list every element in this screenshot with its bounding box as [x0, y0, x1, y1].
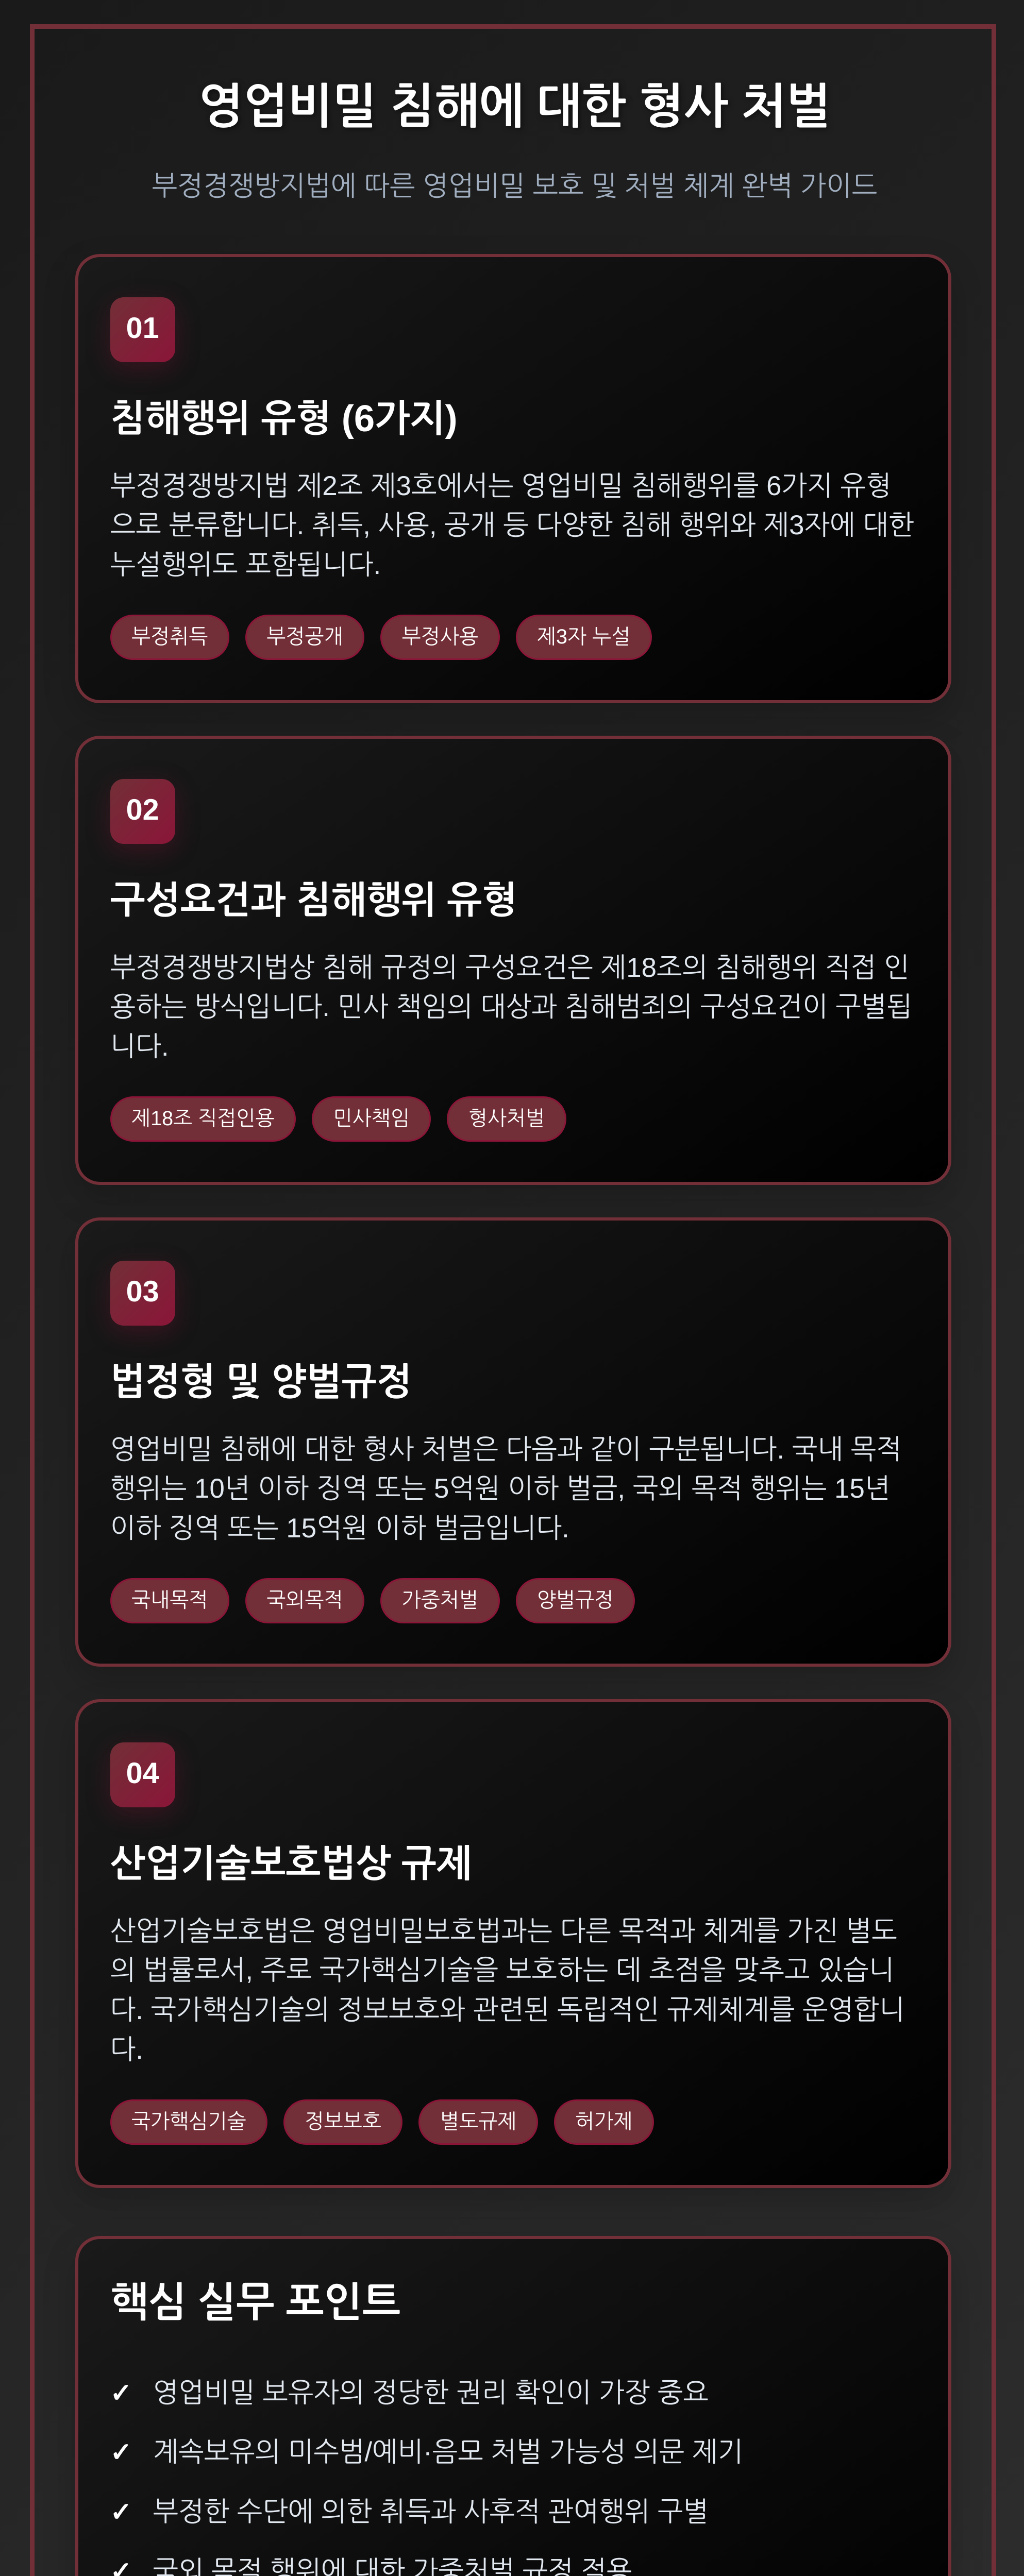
tags 01: 부정취득	[131, 625, 208, 648]
number badge 03: 03	[126, 1275, 159, 1308]
card text 02: 니다.	[110, 1031, 169, 1062]
card text 02: 용하는 방식입니다. 민사 책임의 대상과 침해범죄의 구성요건이 구별됩	[110, 992, 912, 1022]
tags 04: 허가제	[575, 2110, 633, 2133]
card heading 01: 침해행위 유형 (6가지)	[110, 398, 458, 439]
tags 01	[110, 615, 652, 660]
card text 01: 누설행위도 포함됩니다.	[110, 550, 381, 580]
point 1: 영업비밀 보유자의 정당한 권리 확인이 가장 중요	[153, 2378, 709, 2408]
card text 04: 의 법률로서, 주로 국가핵심기술을 보호하는 데 초점을 맞추고 있습니	[110, 1955, 894, 1986]
card text 04: 산업기술보호법은 영업비밀보호법과는 다른 목적과 체계를 가진 별도	[110, 1916, 897, 1946]
tags 02: 제18조 직접인용	[131, 1107, 275, 1130]
point 3: 부정한 수단에 의한 취득과 사후적 관여행위 구별	[153, 2497, 709, 2527]
tags 02: 민사책임	[333, 1107, 410, 1130]
number badge 03	[110, 1261, 175, 1326]
card text 03: 행위는 10년 이하 징역 또는 5억원 이하 벌금, 국외 목적 행위는 15년	[110, 1473, 891, 1504]
tags 03: 국외목적	[266, 1589, 343, 1612]
tags 04: 국가핵심기술	[131, 2110, 246, 2133]
summary heading: 핵심 실무 포인트	[110, 2279, 400, 2325]
card heading 02: 구성요건과 침해행위 유형	[110, 879, 517, 921]
number badge 02: 02	[126, 793, 159, 826]
panel: card 04 industrial technology act	[75, 1699, 951, 2188]
card text 02: 부정경쟁방지법상 침해 규정의 구성요건은 제18조의 침해행위 직접 인	[110, 953, 910, 983]
tags 01: 제3자 누설	[537, 625, 630, 648]
card heading 04: 산업기술보호법상 규제	[110, 1843, 472, 1885]
number badge 04: 04	[126, 1757, 159, 1790]
tags 02	[110, 1096, 566, 1142]
card text 01: 부정경쟁방지법 제2조 제3호에서는 영업비밀 침해행위를 6가지 유형	[110, 471, 892, 501]
subtitle: 부정경쟁방지법에 따른 영업비밀 보호 및 처벌 체계 완벽 가이드	[152, 171, 877, 201]
panel: key practical points	[75, 2236, 951, 2576]
number badge 02	[110, 779, 175, 844]
number badge 01: 01	[126, 312, 159, 345]
point 3: ✓	[110, 2497, 132, 2527]
tags 01: 부정공개	[266, 625, 343, 648]
tags 04	[110, 2099, 654, 2145]
tags 03: 국내목적	[131, 1589, 208, 1612]
panel: card 02 elements	[75, 736, 951, 1185]
point 1: ✓	[110, 2378, 132, 2408]
tags 01: 부정사용	[402, 625, 478, 648]
title: 영업비밀 침해에 대한 형사 처벌	[198, 80, 831, 133]
card text 02	[110, 953, 912, 1062]
card heading 03: 법정형 및 양벌규정	[110, 1361, 412, 1403]
point 2: 계속보유의 미수범/예비·음모 처벌 가능성 의문 제기	[153, 2437, 743, 2467]
number badge 04	[110, 1742, 175, 1807]
tags 04: 정보보호	[305, 2110, 381, 2133]
panel: card 03 statutory penalties	[75, 1217, 951, 1667]
panel: card 01 infringement types	[75, 254, 951, 703]
card text 03: 이하 징역 또는 15억원 이하 벌금입니다.	[110, 1513, 569, 1544]
tags 03: 가중처벌	[402, 1589, 478, 1612]
card text 03: 영업비밀 침해에 대한 형사 처벌은 다음과 같이 구분됩니다. 국내 목적	[110, 1434, 902, 1465]
point 2: ✓	[110, 2437, 132, 2467]
card text 01: 으로 분류합니다. 취득, 사용, 공개 등 다양한 침해 행위와 제3자에 대한	[110, 510, 914, 540]
card text 04: 다. 국가핵심기술의 정보보호와 관련된 독립적인 규제체계를 운영합니	[110, 1995, 905, 2025]
tags 03: 양벌규정	[537, 1589, 613, 1612]
card text 04	[110, 1916, 905, 2065]
number badge 01	[110, 297, 175, 362]
card text 04: 다.	[110, 2035, 143, 2065]
tags 02: 형사처벌	[468, 1107, 545, 1130]
tags 03	[110, 1578, 635, 1623]
card text 03	[110, 1434, 902, 1544]
tags 04: 별도규제	[440, 2110, 516, 2133]
card text 01	[110, 471, 914, 580]
